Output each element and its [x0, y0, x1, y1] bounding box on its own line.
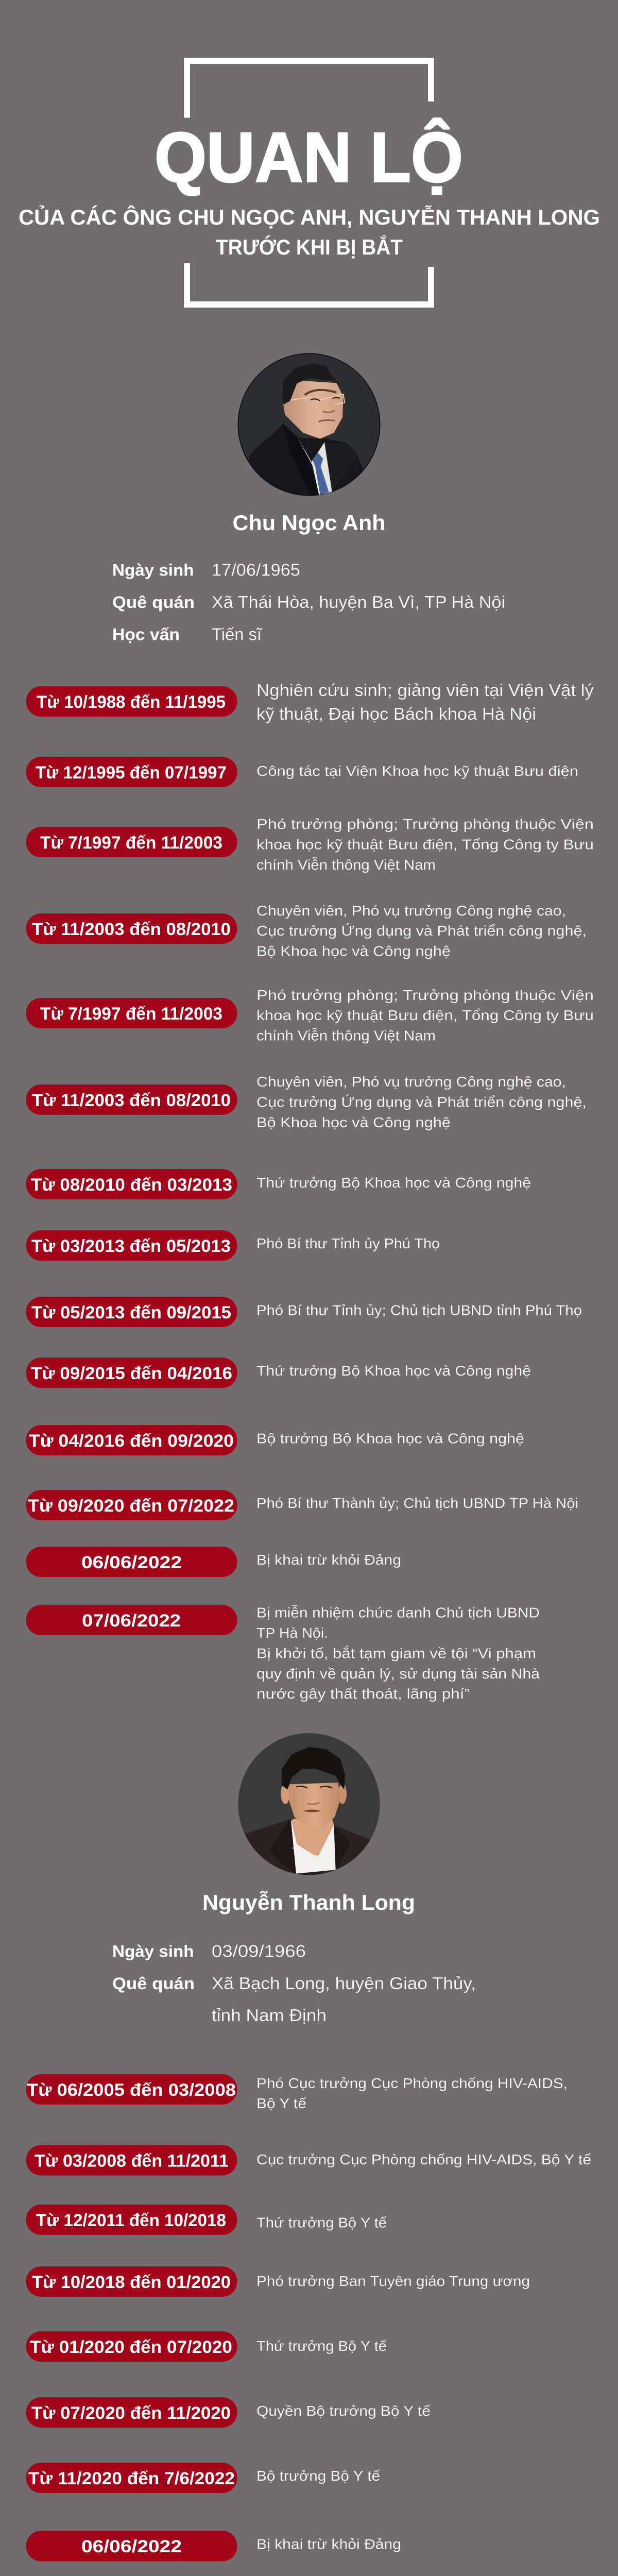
row 2: [26, 757, 578, 787]
row 19: Thứ trưởng Bộ Y tế: [256, 2338, 387, 2354]
row 4: Từ 11/2003 đến 08/2010: [32, 920, 231, 939]
subtitle line 1: CỦA CÁC ÔNG CHU NGỌC ANH, NGUYỄN THANH LONG: [19, 205, 600, 229]
row 22: Bị khai trừ khỏi Đảng: [256, 2536, 401, 2552]
name: Chu Ngọc Anh: Chu Ngọc Anh: [233, 511, 385, 535]
row 6: Bộ Khoa học và Công nghệ: [256, 1114, 451, 1130]
row 20: Từ 07/2020 đến 11/2020: [31, 2403, 231, 2423]
row 11: Từ 04/2016 đến 09/2020: [29, 1431, 234, 1451]
row 21: [26, 2463, 380, 2493]
row 8: Phó Bí thư Tỉnh ủy Phú Thọ: [256, 1235, 440, 1251]
row 6: Từ 11/2003 đến 08/2010: [32, 1091, 231, 1110]
row 14: quy định về quản lý, sử dụng tài sản Nhà: [256, 1666, 540, 1682]
row 3: khoa học kỹ thuật Bưu điện, Tổng Công ty Bưu: [256, 837, 594, 852]
row 4: Bộ Khoa học và Công nghệ: [256, 943, 451, 959]
portrait: Chu Ngọc Anh: [238, 353, 380, 500]
row 5: [26, 987, 594, 1044]
row 3: Từ 7/1997 đến 11/2003: [40, 833, 222, 853]
row 19: [26, 2331, 387, 2362]
row 11: [26, 1425, 524, 1455]
row 12: Phó Bí thư Thành ủy; Chủ tịch UBND TP Hà Nội: [256, 1495, 578, 1511]
bio: hometown: Xã Thái Hòa, huyện Ba Vì, TP Hà Nội: [212, 592, 505, 612]
row 15: Phó Cục trưởng Cục Phòng chống HIV-AIDS,: [256, 2075, 568, 2091]
row 7: Thứ trưởng Bộ Khoa học và Công nghệ: [256, 1175, 531, 1191]
row 14: Bị miễn nhiệm chức danh Chủ tịch UBND: [256, 1604, 540, 1621]
row 12: [26, 1490, 578, 1520]
row 5: Từ 7/1997 đến 11/2003: [40, 1004, 222, 1024]
row 6: [26, 1074, 587, 1130]
portrait: Nguyễn Thanh Long: [238, 1733, 380, 1880]
bio: date of birth: Ngày sinh: [112, 1942, 194, 1961]
row 16: Từ 03/2008 đến 11/2011: [35, 2151, 229, 2171]
row 10: Từ 09/2015 đến 04/2016: [31, 1364, 232, 1383]
row 14: nước gây thất thoát, lãng phí”: [256, 1686, 470, 1702]
row 1: kỹ thuật, Đại học Bách khoa Hà Nội: [256, 704, 536, 723]
title frame bracket: [187, 61, 431, 304]
row 6: Chuyên viên, Phó vụ trưởng Công nghệ cao,: [256, 1074, 566, 1090]
row 16: Cục trưởng Cục Phòng chống HIV-AIDS, Bộ Y tế: [256, 2151, 591, 2167]
row 9: [26, 1297, 582, 1327]
row 3: Phó trưởng phòng; Trưởng phòng thuộc Viện: [256, 816, 594, 832]
row 8: Từ 03/2013 đến 05/2013: [31, 1236, 231, 1256]
row 6: Cục trưởng Ứng dụng và Phát triển công nghệ,: [256, 1094, 587, 1110]
subtitle line 2: TRƯỚC KHI BỊ BẮT: [216, 234, 403, 259]
bio: hometown: Xã Bạch Long, huyện Giao Thủy,: [212, 1974, 476, 1993]
row 20: [26, 2397, 431, 2428]
row 9: Từ 05/2013 đến 09/2015: [31, 1303, 231, 1323]
row 3: chính Viễn thông Việt Nam: [256, 857, 436, 873]
row 21: Từ 11/2020 đến 7/6/2022: [28, 2469, 235, 2488]
bio: date of birth: 03/09/1966: [212, 1941, 306, 1961]
row 22: 06/06/2022: [81, 2537, 182, 2556]
row 14: Bị khởi tố, bắt tạm giam về tội “Vi phạm: [256, 1646, 536, 1661]
row 16: [26, 2145, 591, 2175]
row 12: Từ 09/2020 đến 07/2022: [28, 1496, 234, 1516]
row 14: [26, 1604, 540, 1702]
bio: hometown: Quê quán: [112, 593, 195, 612]
row 17: Thứ trưởng Bộ Y tế: [256, 2214, 387, 2231]
row 14: TP Hà Nội.: [256, 1625, 328, 1641]
row 5: chính Viễn thông Việt Nam: [256, 1027, 436, 1044]
row 20: Quyền Bộ trưởng Bộ Y tế: [256, 2403, 431, 2419]
bio: date of birth: [112, 561, 300, 579]
row 9: Phó Bí thư Tỉnh ủy; Chủ tịch UBND tỉnh Phú Thọ: [256, 1302, 582, 1318]
row 2: Từ 12/1995 đến 07/1997: [36, 763, 227, 783]
row 17: [26, 2205, 387, 2235]
row 19: Từ 01/2020 đến 07/2020: [30, 2337, 232, 2357]
bio: hometown: Quê quán: [112, 1974, 195, 1993]
row 13: Bị khai trừ khỏi Đảng: [256, 1552, 401, 1568]
row 11: Bộ trưởng Bộ Khoa học và Công nghệ: [256, 1430, 524, 1447]
bio: education: Học vấn: [112, 625, 180, 644]
name: Nguyễn Thanh Long: Nguyễn Thanh Long: [202, 1890, 415, 1914]
bio: date of birth: [112, 1941, 306, 1961]
row 13: [26, 1547, 401, 1577]
row 7: [26, 1169, 531, 1199]
row 5: khoa học kỹ thuật Bưu điện, Tổng Công ty Bưu: [256, 1007, 594, 1023]
row 17: Từ 12/2011 đến 10/2018: [36, 2211, 226, 2230]
row 2: Công tác tại Viện Khoa học kỹ thuật Bưu điện: [256, 763, 578, 779]
bio: hometown: tỉnh Nam Định: [212, 2006, 327, 2025]
bio: date of birth: 17/06/1965: [212, 561, 300, 579]
row 1: Từ 10/1988 đến 11/1995: [37, 692, 226, 712]
bio: education: [112, 624, 263, 644]
bio: date of birth: Ngày sinh: [112, 561, 194, 579]
row 10: [26, 1358, 531, 1388]
row 15: Bộ Y tế: [256, 2095, 306, 2111]
row 18: Phó trưởng Ban Tuyên giáo Trung ương: [256, 2273, 530, 2289]
row 5: Phó trưởng phòng; Trưởng phòng thuộc Viện: [256, 987, 594, 1003]
row 1: [26, 681, 594, 723]
panel: Nguyễn Thanh Long profile: [112, 1733, 476, 2025]
row 18: Từ 10/2018 đến 01/2020: [32, 2273, 231, 2292]
row 15: Từ 06/2005 đến 03/2008: [27, 2080, 236, 2100]
timeline: Chu Ngọc Anh career: [26, 681, 594, 1702]
row 18: [26, 2266, 530, 2297]
bio: education: Tiến sĩ: [212, 624, 263, 644]
row 21: Bộ trưởng Bộ Y tế: [256, 2468, 380, 2484]
row 4: [26, 903, 587, 959]
row 15: [26, 2074, 568, 2111]
row 8: [26, 1230, 440, 1261]
timeline: Nguyễn Thanh Long career: [26, 2074, 597, 2576]
row 14: 07/06/2022: [82, 1611, 181, 1631]
main title: QUAN LỘ: [154, 118, 463, 197]
title block: [19, 61, 600, 304]
row 13: 06/06/2022: [81, 1553, 182, 1572]
row 10: Thứ trưởng Bộ Khoa học và Công nghệ: [256, 1363, 531, 1379]
row 22: [26, 2531, 401, 2562]
panel: Chu Ngọc Anh profile: [112, 353, 505, 644]
row 1: Nghiên cứu sinh; giảng viên tại Viện Vật lý: [256, 681, 594, 700]
row 4: Chuyên viên, Phó vụ trưởng Công nghệ cao,: [256, 903, 566, 919]
row 3: [26, 816, 594, 873]
bio: hometown: [112, 1974, 476, 2025]
row 4: Cục trưởng Ứng dụng và Phát triển công nghệ,: [256, 923, 587, 939]
row 7: Từ 08/2010 đến 03/2013: [31, 1175, 232, 1195]
